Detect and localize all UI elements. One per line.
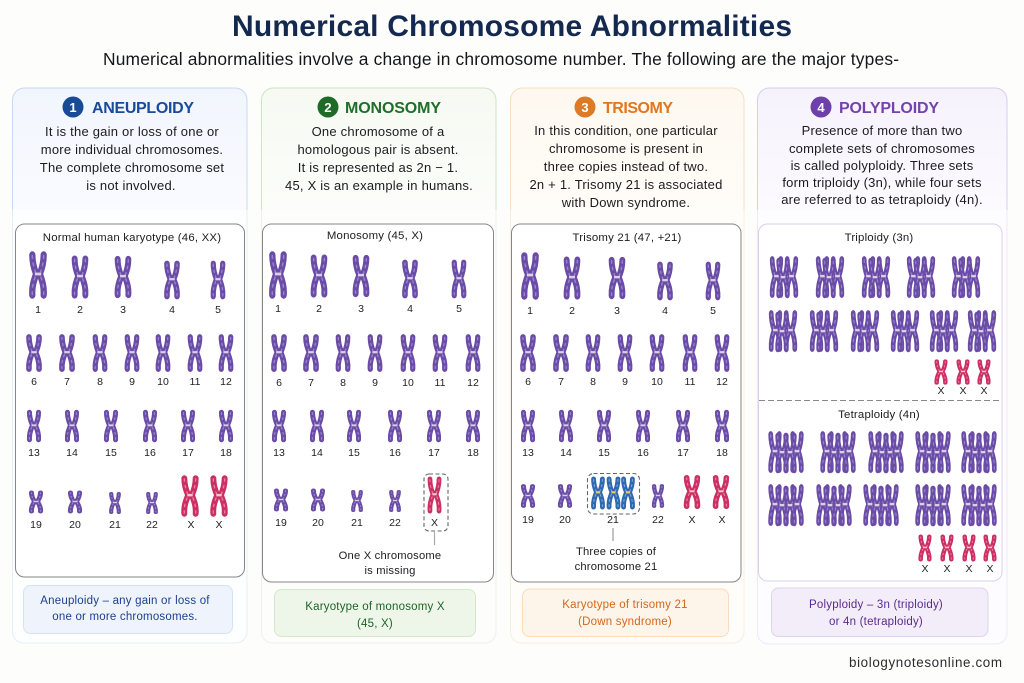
text: aneuploidy definition: It is the gain or loss of one or — [45, 124, 219, 139]
karyotype box: polyploidy — [758, 224, 1002, 581]
chromosomes row 3: 14 — [560, 447, 572, 459]
chromosomes row 2: 6 — [31, 376, 37, 388]
chromosomes row 1: 4 — [407, 303, 413, 315]
source credit: biologynotesonline.com — [849, 655, 1002, 670]
chromosomes row 3: 17 — [428, 447, 440, 459]
text: monosomy definition: homologous pair is absent. — [297, 142, 459, 157]
text: aneuploidy definition — [40, 124, 224, 193]
chromosomes row 2: 12 — [220, 376, 232, 388]
karyotype title: Monosomy (45, X) — [327, 230, 423, 242]
chromosomes row 1: 5 — [710, 305, 716, 317]
chromosomes row 3: 13 — [522, 447, 534, 459]
text: monosomy definition: 45, X is an example in humans. — [285, 178, 473, 193]
divider — [759, 400, 1002, 402]
chromosomes row 2: 7 — [558, 376, 564, 388]
triploidy X chromosomes: X — [980, 385, 988, 397]
chromosomes row 2: 8 — [97, 376, 103, 388]
callout: three copies of chromosome 21: chromosome 21 — [575, 561, 657, 573]
chromosomes row 4: X — [718, 514, 726, 526]
text: polyploidy definition: complete sets of chromosomes — [789, 141, 975, 156]
callout: three copies of chromosome 21: 21 — [607, 514, 619, 526]
chromosomes row 4: 22 — [389, 517, 401, 529]
chromosomes row 2 — [274, 337, 479, 389]
caption: aneuploidy: one or more chromosomes. — [52, 611, 198, 623]
tetraploidy X chromosomes: X — [965, 563, 973, 575]
chromosomes row 2: 10 — [157, 376, 169, 388]
karyotype title: Normal human karyotype (46, XX) — [43, 232, 221, 244]
chromosomes row 4 — [30, 478, 225, 531]
chromosomes row 4: 20 — [312, 517, 324, 529]
title: Numerical Chromosome Abnormalities — [232, 10, 792, 43]
caption: aneuploidy: Aneuploidy – any gain or loss of — [40, 595, 210, 607]
subtitle: Numerical abnormalities involve a change in chromosome number. The following are the major types- — [103, 49, 899, 69]
heading: aneuploidy — [62, 96, 194, 118]
heading: trisomy — [574, 96, 673, 118]
chromosomes row 1: 2 — [77, 304, 83, 316]
chromosomes row 3: 16 — [389, 447, 401, 459]
chromosomes row 3: 16 — [144, 447, 156, 459]
panel: trisomy — [510, 88, 744, 643]
chromosomes row 3: 17 — [182, 447, 194, 459]
heading: monosomy — [318, 96, 441, 118]
chromosomes row 1 — [272, 255, 464, 315]
caption: monosomy — [274, 590, 476, 636]
caption: monosomy: (45, X) — [357, 618, 393, 630]
chromosomes row 3: 18 — [467, 447, 479, 459]
chromosomes row 3: 15 — [105, 447, 117, 459]
caption: aneuploidy — [24, 586, 232, 634]
karyotype box: normal — [16, 224, 244, 577]
chromosomes row 2 — [523, 337, 728, 388]
chromosomes row 4: 20 — [69, 519, 81, 531]
chromosomes row 3: 13 — [273, 447, 285, 459]
text: polyploidy definition: is called polyploidy. Three sets — [791, 158, 974, 173]
karyotype box: monosomy — [262, 224, 494, 582]
text: polyploidy definition: form triploidy (3n), while four sets — [782, 175, 982, 190]
chromosomes row 4: 21 — [109, 519, 121, 531]
heading: aneuploidy: 1 — [69, 100, 77, 115]
chromosomes row 3: 13 — [28, 447, 40, 459]
chromosomes row 3: 18 — [716, 447, 728, 459]
chromosomes row 3 — [28, 412, 232, 459]
tetraploidy row 1 — [771, 434, 994, 470]
heading: polyploidy: 4 — [817, 100, 825, 115]
chromosomes row 4: 19 — [275, 517, 287, 529]
chromosomes row 2: 12 — [467, 377, 479, 389]
text: aneuploidy definition: is not involved. — [86, 178, 176, 193]
heading: trisomy: TRISOMY — [603, 100, 673, 117]
tetraploidy X chromosomes: X — [943, 563, 951, 575]
caption: trisomy — [522, 589, 728, 636]
caption: trisomy: Karyotype of trisomy 21 — [562, 599, 688, 611]
chromosomes row 4: X — [688, 514, 696, 526]
caption: polyploidy: or 4n (tetraploidy) — [829, 616, 923, 628]
triploidy row 1 — [772, 259, 978, 295]
tetraploidy row 2 — [771, 487, 994, 523]
chromosomes row 1: 5 — [215, 304, 221, 316]
chromosomes row 2: 7 — [308, 377, 314, 389]
chromosomes row 2: 10 — [402, 377, 414, 389]
panel: polyploidy — [758, 88, 1007, 644]
chromosomes row 1: 1 — [35, 304, 41, 316]
callout: three copies of chromosome 21: Three copies of — [576, 546, 657, 558]
header background: monosomy — [262, 88, 496, 210]
chromosomes row 3 — [522, 412, 728, 459]
triploidy X chromosomes: X — [959, 385, 967, 397]
tetraploidy heading: Tetraploidy (4n) — [838, 409, 920, 421]
callout: missing X — [339, 474, 448, 577]
text: trisomy definition: chromosome is present in — [549, 141, 703, 156]
chromosomes row 3: 14 — [66, 447, 78, 459]
chromosomes row 4: 19 — [30, 519, 42, 531]
chromosomes row 1: 4 — [662, 305, 668, 317]
header background: trisomy — [510, 88, 744, 210]
heading: polyploidy: POLYPLOIDY — [839, 100, 939, 117]
chromosomes row 2: 6 — [276, 377, 282, 389]
heading: polyploidy — [810, 96, 939, 118]
chromosomes row 4: 19 — [522, 514, 534, 526]
chromosomes row 3: 14 — [311, 447, 323, 459]
text: trisomy definition: three copies instead of two. — [544, 159, 708, 174]
tetraploidy X chromosomes: X — [986, 563, 994, 575]
text: polyploidy definition: Presence of more than two — [802, 123, 962, 138]
chromosomes row 4: 22 — [146, 519, 158, 531]
triploidy heading: Triploidy (3n) — [845, 232, 913, 244]
chromosomes row 3: 16 — [637, 447, 649, 459]
tetraploidy X chromosomes: X — [921, 563, 929, 575]
chromosomes row 4: X — [215, 519, 223, 531]
chromosomes row 3: 17 — [677, 447, 689, 459]
text: polyploidy definition: are referred to as tetraploidy (4n). — [781, 192, 983, 207]
chromosomes row 2: 9 — [372, 377, 378, 389]
header background: aneuploidy — [12, 88, 247, 210]
triploidy X chromosomes: X — [937, 385, 945, 397]
chromosomes row 2: 11 — [685, 376, 696, 388]
chromosomes row 3: 18 — [220, 447, 232, 459]
chromosomes row 1: 3 — [120, 304, 126, 316]
chromosomes row 4: 20 — [559, 514, 571, 526]
chromosomes row 2: 11 — [190, 376, 201, 388]
chromosomes row 1: 3 — [358, 303, 364, 315]
callout: three copies of chromosome 21 — [575, 474, 657, 573]
heading: monosomy: 2 — [324, 100, 332, 115]
chromosomes row 3: 15 — [598, 447, 610, 459]
chromosomes row 4: 21 — [351, 517, 363, 529]
text: aneuploidy definition: more individual chromosomes. — [41, 142, 223, 157]
chromosomes row 2: 9 — [622, 376, 628, 388]
chromosomes row 2: 9 — [129, 376, 135, 388]
text: monosomy definition: One chromosome of a — [312, 124, 445, 139]
caption: trisomy: (Down syndrome) — [578, 616, 672, 628]
chromosomes row 3 — [273, 412, 479, 459]
text: trisomy definition: with Down syndrome. — [561, 195, 690, 210]
chromosomes row 2: 12 — [716, 376, 728, 388]
chromosomes row 4 — [522, 478, 726, 526]
text: monosomy definition: It is represented as 2n − 1. — [298, 160, 458, 175]
chromosomes row 1: 2 — [316, 303, 322, 315]
callout: missing X: One X chromosome — [339, 550, 441, 562]
text: trisomy definition — [529, 123, 723, 210]
chromosomes row 2: 8 — [590, 376, 596, 388]
caption: polyploidy: Polyploidy – 3n (triploidy) — [809, 599, 943, 611]
chromosomes row 1: 1 — [275, 303, 281, 315]
text: trisomy definition: 2n + 1. Trisomy 21 is associated — [529, 177, 723, 192]
chromosomes row 4: 22 — [652, 514, 664, 526]
chromosomes row 1 — [32, 255, 223, 316]
heading: aneuploidy: ANEUPLOIDY — [92, 100, 194, 117]
chromosomes row 4: X — [187, 519, 195, 531]
chromosomes row 2: 7 — [64, 376, 70, 388]
chromosomes row 4 — [275, 490, 401, 529]
triploidy row 2 — [771, 313, 994, 349]
karyotype box: trisomy — [512, 224, 741, 582]
chromosomes row 1 — [524, 256, 718, 317]
chromosomes row 2: 10 — [651, 376, 663, 388]
tetraploidy X chromosomes — [921, 537, 994, 575]
callout: missing X: X — [431, 517, 438, 529]
text: monosomy definition — [285, 124, 473, 193]
heading: monosomy: MONOSOMY — [345, 100, 441, 117]
panel: monosomy — [262, 88, 496, 643]
chromosomes row 1: 1 — [527, 305, 533, 317]
chromosomes row 2: 8 — [340, 377, 346, 389]
caption: polyploidy — [772, 588, 988, 636]
chromosomes row 1: 3 — [614, 305, 620, 317]
chromosomes row 1: 5 — [456, 303, 462, 315]
karyotype title: Trisomy 21 (47, +21) — [573, 232, 681, 244]
text: trisomy definition: In this condition, one particular — [534, 123, 718, 138]
chromosomes row 3: 15 — [348, 447, 360, 459]
chromosomes row 2: 11 — [435, 377, 446, 389]
chromosomes row 1: 4 — [169, 304, 175, 316]
header background: polyploidy — [758, 88, 1007, 210]
panel: aneuploidy — [12, 88, 247, 643]
chromosomes row 2 — [29, 337, 232, 388]
heading: trisomy: 3 — [581, 100, 589, 115]
chromosomes row 1: 2 — [569, 305, 575, 317]
triploidy X chromosomes — [937, 361, 988, 397]
callout: missing X: is missing — [364, 565, 416, 577]
text: polyploidy definition — [781, 123, 983, 207]
caption: monosomy: Karyotype of monosomy X — [305, 601, 445, 613]
chromosomes row 2: 6 — [525, 376, 531, 388]
text: aneuploidy definition: The complete chromosome set — [40, 160, 224, 175]
